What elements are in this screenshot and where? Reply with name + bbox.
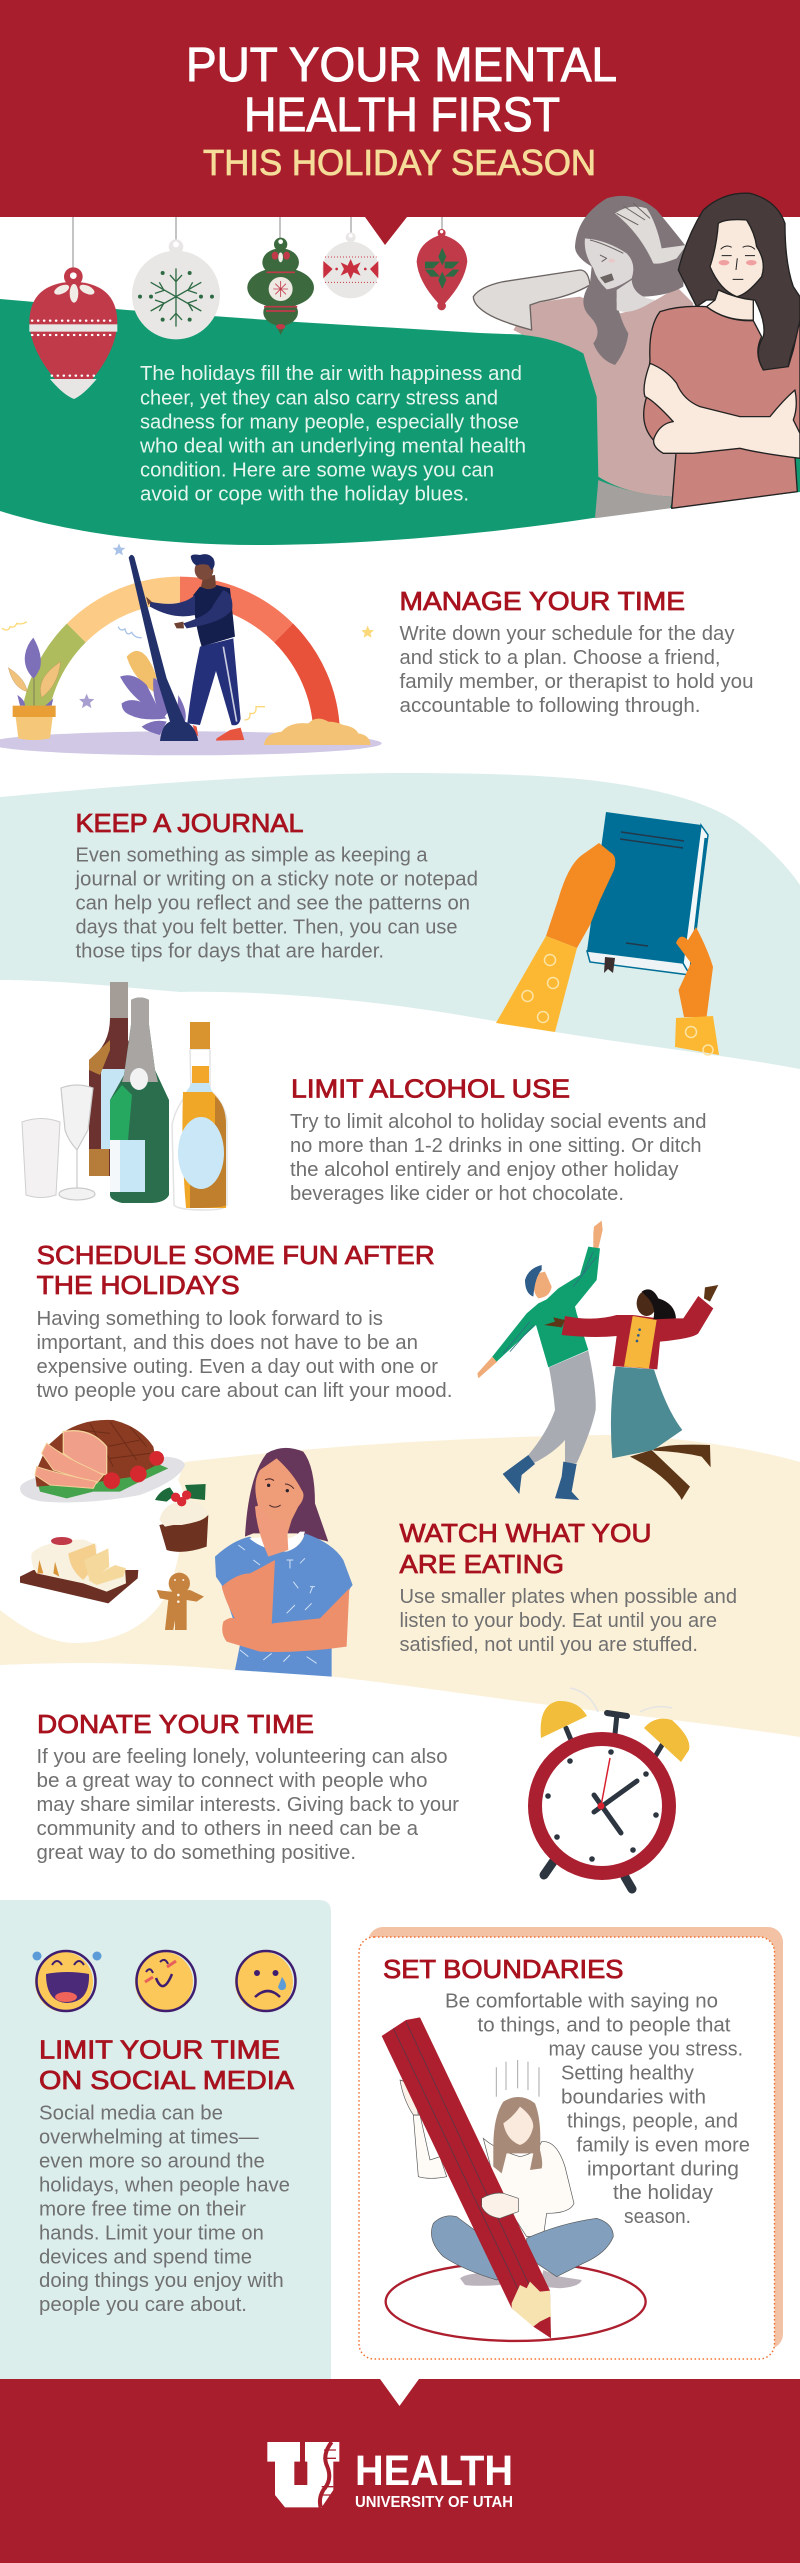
body text: to things, and to people that [478, 2015, 731, 2037]
body text: the alcohol entirely and enjoy other holiday [290, 1159, 678, 1181]
icon: winking emoji [135, 1951, 196, 2012]
illustration: man moving gauge [0, 543, 382, 755]
subtitle: THIS HOLIDAY SEASON [203, 142, 596, 183]
body text: may share similar interests. Giving back to your [36, 1794, 459, 1816]
body text: Having something to look forward to is [36, 1308, 383, 1330]
panel: keep a journal [0, 773, 800, 1069]
intro text: The holidays fill the air with happiness and [140, 363, 522, 385]
body text: family member, or therapist to hold you [400, 671, 754, 693]
body text: Even something as simple as keeping a [76, 845, 428, 867]
iced loaf [20, 1537, 138, 1603]
body text: can help you reflect and see the patterns on [76, 893, 470, 915]
panel: limit alcohol use [22, 982, 706, 1210]
title [186, 39, 617, 142]
heading: LIMIT YOUR TIME [39, 2035, 280, 2065]
body text: things, people, and [567, 2110, 738, 2132]
body text: great way to do something positive. [36, 1842, 356, 1864]
heading: KEEP A JOURNAL [76, 808, 304, 838]
intro text: condition. Here are some ways you can [140, 460, 494, 482]
heading [37, 1240, 435, 1300]
man [146, 554, 244, 741]
panel: manage your time [0, 543, 754, 755]
stars and squiggles [2, 543, 374, 720]
heading: WATCH WHAT YOU [400, 1518, 652, 1548]
body text: expensive outing. Even a day out with one or [36, 1356, 438, 1378]
panel: limit your time on social media [0, 1900, 331, 2380]
ornament: nordic white [322, 232, 379, 298]
body text: doing things you enjoy with [39, 2270, 284, 2292]
body text: more free time on their [39, 2198, 246, 2220]
body text: hands. Limit your time on [39, 2222, 264, 2244]
body text: Try to limit alcohol to holiday social events and [290, 1111, 706, 1133]
panel: donate your time [36, 1688, 689, 1889]
background wave [0, 773, 800, 1069]
body text: family is even more [576, 2134, 750, 2156]
body text: listen to your body. Eat until you are [400, 1610, 717, 1632]
panel: cream background [0, 1435, 800, 1737]
body text: overwhelming at times— [39, 2126, 259, 2148]
title: PUT YOUR MENTAL [186, 39, 617, 92]
heading [39, 2035, 295, 2095]
ornament: red [29, 267, 117, 399]
body text: journal or writing on a sticky note or notepad [74, 869, 478, 891]
ornament: green [247, 238, 314, 335]
ham on plate [20, 1420, 185, 1502]
logo: wordmark: HEALTH [355, 2447, 513, 2495]
yellow bottle [172, 1022, 227, 1210]
heading: THE HOLIDAYS [37, 1270, 240, 1300]
intro text [139, 363, 526, 506]
plant: pot [8, 638, 61, 740]
body text [290, 1111, 706, 1205]
illustration: woman with giant pencil [382, 2017, 646, 2341]
body text [74, 845, 478, 963]
intro text: avoid or cope with the holiday blues. [140, 484, 469, 506]
body text: beverages like cider or hot chocolate. [290, 1183, 624, 1205]
title: HEALTH FIRST [244, 89, 560, 142]
giant pencil [382, 2017, 551, 2338]
heading: SCHEDULE SOME FUN AFTER [37, 1240, 435, 1270]
body text: Be comfortable with saying no [445, 1991, 718, 2013]
flute glass [59, 1085, 95, 1200]
body text [400, 623, 754, 717]
ground [0, 731, 382, 755]
body text: and stick to a plan. Choose a friend, [400, 647, 720, 669]
body text: community and to others in need can be a [36, 1818, 419, 1840]
panel background [0, 1900, 331, 2380]
body text: Use smaller plates when possible and [400, 1586, 737, 1608]
intro text: cheer, yet they can also carry stress and [140, 388, 498, 410]
front hand [482, 2193, 518, 2218]
heading: ON SOCIAL MEDIA [39, 2065, 295, 2095]
illustration: stressed woman and shadow [473, 193, 800, 518]
card shadow [368, 1927, 783, 2349]
heading: LIMIT ALCOHOL USE [291, 1074, 570, 1104]
man dancing [477, 1221, 603, 1500]
heading: SET BOUNDARIES [383, 1954, 624, 1984]
footer banner [0, 2379, 800, 2563]
header banner [0, 0, 800, 245]
body text [400, 1586, 737, 1656]
heading: DONATE YOUR TIME [37, 1709, 314, 1739]
body text: season. [624, 2206, 691, 2228]
illustration: holiday food [20, 1420, 208, 1630]
illustration: dancing couple [477, 1221, 718, 1500]
body text: devices and spend time [39, 2246, 252, 2268]
body text: boundaries with [561, 2086, 706, 2108]
heading [400, 1518, 652, 1579]
body text: those tips for days that are harder. [76, 941, 384, 963]
illustration: thoughtful woman [215, 1448, 353, 1677]
intro text: who deal with an underlying mental health [139, 436, 526, 458]
body text: satisfied, not until you are stuffed. [400, 1634, 698, 1656]
body text: important during [587, 2158, 739, 2180]
body text: If you are feeling lonely, volunteering can also [36, 1746, 448, 1768]
figure: front woman [644, 193, 800, 508]
pudding [155, 1484, 208, 1552]
illustration: bottles and glasses [22, 982, 227, 1210]
body text [445, 1991, 750, 2228]
ornaments [29, 229, 467, 399]
body text: important, and this does not have to be an [36, 1332, 418, 1354]
icon: alarm clock [535, 1688, 689, 1889]
panel: set boundaries [359, 1927, 783, 2359]
panel: intro green wave [0, 299, 800, 545]
woman dancing [544, 1285, 718, 1500]
body text: the holiday [613, 2182, 713, 2204]
body text [36, 1746, 459, 1864]
illustration: hands holding book [496, 812, 719, 1055]
figure: grey woman [473, 196, 693, 518]
tumbler glass [22, 1118, 60, 1198]
body text: even more so around the [39, 2150, 265, 2172]
ornament strings [73, 217, 442, 272]
gauge needle [129, 555, 198, 741]
icon: laughing emoji [32, 1951, 102, 2012]
body text: two people you care about can lift your mood. [36, 1380, 452, 1402]
logo: wordmark: UNIVERSITY OF UTAH [355, 2494, 513, 2511]
plant: leaves [120, 651, 186, 735]
panel: watch what you are eating [20, 1420, 737, 1677]
gauge [33, 590, 327, 737]
wine bottle [89, 982, 134, 1176]
boundary circle [386, 2262, 646, 2341]
body text: may cause you stress. [548, 2038, 743, 2060]
body text: holidays, when people have [39, 2174, 290, 2196]
card [359, 1937, 774, 2359]
body text: Social media can be [39, 2102, 223, 2124]
body text: Write down your schedule for the day [400, 623, 734, 645]
body text: no more than 1-2 drinks in one sitting. Or ditch [290, 1135, 702, 1157]
ornament: snowflake [132, 239, 220, 339]
body text: days that you felt better. Then, you can use [76, 917, 458, 939]
body text: accountable to following through. [400, 695, 700, 717]
champagne bottle [110, 998, 169, 1203]
mound [264, 719, 371, 745]
gingerbread man [157, 1573, 204, 1630]
body text [36, 1308, 452, 1402]
body text: be a great way to connect with people who [36, 1770, 428, 1792]
heading: MANAGE YOUR TIME [400, 586, 685, 616]
body text: people you care about. [39, 2294, 247, 2316]
seated woman [400, 2080, 613, 2288]
body text [39, 2102, 290, 2316]
logo: block U with DNA [267, 2442, 339, 2507]
icon: crying emoji [235, 1951, 296, 2012]
heading: ARE EATING [400, 1549, 564, 1579]
panel: schedule some fun [36, 1221, 718, 1500]
intro text: sadness for many people, especially those [140, 412, 519, 434]
stress lines [496, 2060, 539, 2097]
body text: Setting healthy [561, 2062, 694, 2084]
ornament: red star [417, 229, 467, 310]
